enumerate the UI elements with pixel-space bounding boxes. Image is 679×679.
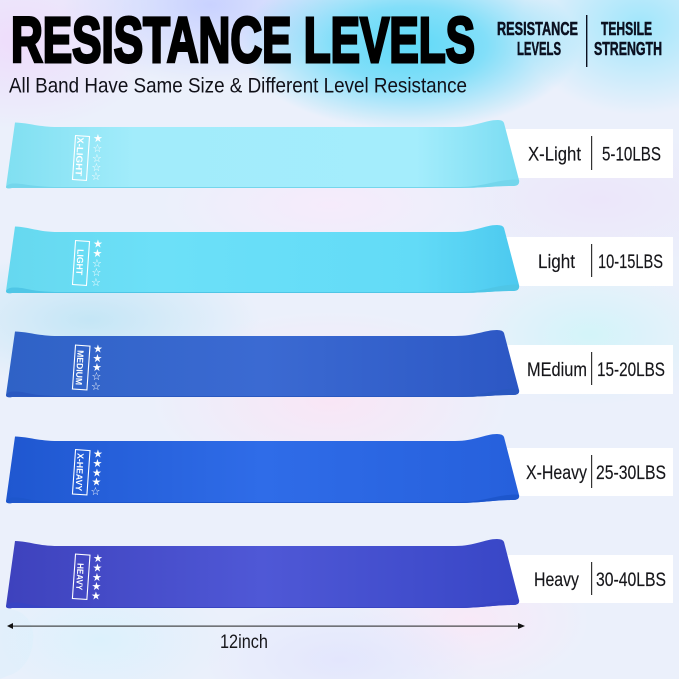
subtitle: All Band Have Same Size & Different Level Resistance [9,74,467,98]
label box [505,237,673,286]
label box: MEdium [527,360,587,381]
watercolor edge, bottom left [0,609,33,679]
label box: 5-10LBS [602,144,661,166]
column headers [497,15,662,67]
label box: X-Heavy [526,463,587,484]
header: tensile strength: TEHSILE [601,19,652,39]
label box: X-Light [528,144,582,166]
row: X-Heavy [6,434,673,503]
label box: 25-30LBS [596,463,666,484]
dimension arrow [7,623,525,629]
row: Light [6,225,673,293]
row: Heavy [6,539,673,608]
band: x-heavy: X-HEAVY [74,453,85,491]
band: heavy: ★ [92,571,102,584]
band: heavy [6,539,519,608]
band: heavy: HEAVY [74,563,85,590]
row: Medium [6,330,673,397]
label box: Heavy [534,570,579,591]
band: medium: ★ [92,352,102,365]
label box [505,129,673,178]
band: light: ★ [92,247,102,260]
band: medium [6,330,519,397]
title: RESISTANCE LEVELS [11,4,475,76]
band: x-heavy: ★ [92,476,102,488]
band: x-heavy: ☆ [90,485,100,498]
band: x-light [6,120,519,188]
band: x-light: ★ [93,132,103,145]
label box [505,555,673,603]
band: heavy: ★ [93,552,103,565]
band: x-light: ☆ [92,152,102,165]
label box [505,345,673,394]
band: light: ☆ [92,257,102,270]
band: x-light: X-LIGHT [73,137,85,177]
band: x-heavy: ★ [92,457,102,470]
band: medium: ☆ [92,370,102,383]
column headers: LEVELS [517,39,561,59]
band: medium: ★ [92,361,102,374]
band: x-light: ☆ [92,142,102,155]
band: x-light: ☆ [92,161,102,174]
dimension label: 12inch [220,632,268,653]
band: x-heavy: ★ [93,448,103,460]
band: x-heavy: ★ [92,466,102,480]
band: light [6,225,519,293]
band: heavy: ★ [92,562,102,574]
label box: 15-20LBS [597,360,665,381]
band: medium: MEDIUM [74,350,85,385]
label box [505,448,673,496]
band: medium: ★ [93,342,103,356]
band: light: LIGHT [74,249,85,276]
band: medium: ☆ [91,380,101,393]
band: light: ☆ [91,276,101,289]
row: X-Light [6,120,673,188]
band: light: ☆ [92,266,102,279]
band: heavy: ★ [91,590,101,602]
band: light: ★ [93,238,103,250]
label box: 30-40LBS [596,570,666,591]
band: heavy: ★ [92,580,102,593]
header: resistance levels: RESISTANCE [497,19,578,39]
band: x-heavy [6,434,519,503]
band: x-light: ☆ [91,170,101,183]
label box: Light [538,252,576,273]
